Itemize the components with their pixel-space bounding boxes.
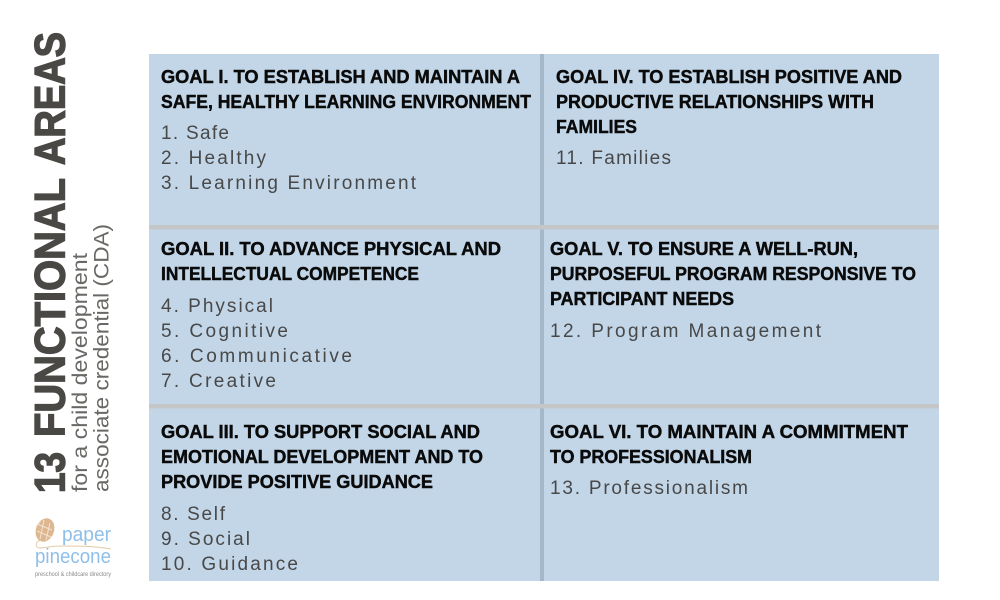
panel: goal II: INTELLECTUAL COMPETENCE: [161, 263, 419, 284]
panel: goal II: 6. Communicative: [161, 346, 352, 367]
panel: goal V: 12. Program Management: [550, 321, 822, 342]
panel: goal I: GOAL I. TO ESTABLISH AND MAINTAIN A: [161, 66, 520, 87]
panel: goal I: [161, 66, 532, 194]
panel: goal V: PARTICIPANT NEEDS: [550, 288, 734, 309]
panel: goal II: [161, 238, 501, 392]
panel: goal II: 4. Physical: [161, 296, 273, 317]
panel: goal IV: 11. Families: [556, 148, 671, 169]
subtitle: associate credential (CDA): [90, 224, 114, 492]
panel: goal IV: PRODUCTIVE RELATIONSHIPS WITH: [556, 91, 874, 112]
panel: goals grid background: [149, 54, 939, 581]
panel: goal V: PURPOSEFUL PROGRAM RESPONSIVE TO: [550, 263, 916, 284]
panel: goal I: 2. Healthy: [161, 148, 266, 169]
logo: paper pinecone: [32, 516, 111, 578]
panel: goal III: 10. Guidance: [161, 554, 298, 575]
logo: paper pinecone: paper: [62, 524, 111, 546]
panel: goal IV: [556, 66, 902, 169]
panel: goal III: 8. Self: [161, 504, 226, 525]
panel: goal I: 3. Learning Environment: [161, 173, 417, 194]
panel: goal V: GOAL V. TO ENSURE A WELL-RUN,: [550, 238, 858, 259]
panel: goal VI: TO PROFESSIONALISM: [550, 446, 752, 467]
panel: goal VI: [550, 421, 909, 499]
panel: goal III: EMOTIONAL DEVELOPMENT AND TO: [161, 446, 483, 467]
logo: paper pinecone: preschool & childcare directory: [35, 572, 111, 578]
panel: goal II: 5. Cognitive: [161, 321, 288, 342]
panel: goal II: GOAL II. TO ADVANCE PHYSICAL AND: [161, 238, 501, 259]
panel: goal I: SAFE, HEALTHY LEARNING ENVIRONMENT: [161, 91, 532, 112]
panel: goal IV: FAMILIES: [556, 116, 637, 137]
subtitle: [69, 224, 114, 492]
panel: goal V: [550, 238, 916, 342]
panel: goal VI: 13. Professionalism: [550, 478, 748, 499]
title: [26, 32, 74, 493]
icon: pinecone: [32, 516, 111, 549]
title: FUNCTIONAL: [26, 178, 74, 437]
subtitle: for a child development: [69, 253, 92, 492]
panel: goal III: GOAL III. TO SUPPORT SOCIAL AND: [161, 421, 480, 442]
logo: paper pinecone: pinecone: [35, 546, 111, 568]
panel: goal II: 7. Creative: [161, 371, 276, 392]
title: AREAS: [26, 32, 74, 165]
panel: goal III: 9. Social: [161, 529, 250, 550]
panel: goal III: [161, 421, 483, 575]
panel: goal VI: GOAL VI. TO MAINTAIN A COMMITMENT: [550, 421, 909, 442]
title: 13: [26, 452, 74, 493]
panel: goal IV: GOAL IV. TO ESTABLISH POSITIVE AND: [556, 66, 902, 87]
panel: goal I: 1. Safe: [161, 123, 229, 144]
panel: goal III: PROVIDE POSITIVE GUIDANCE: [161, 471, 433, 492]
